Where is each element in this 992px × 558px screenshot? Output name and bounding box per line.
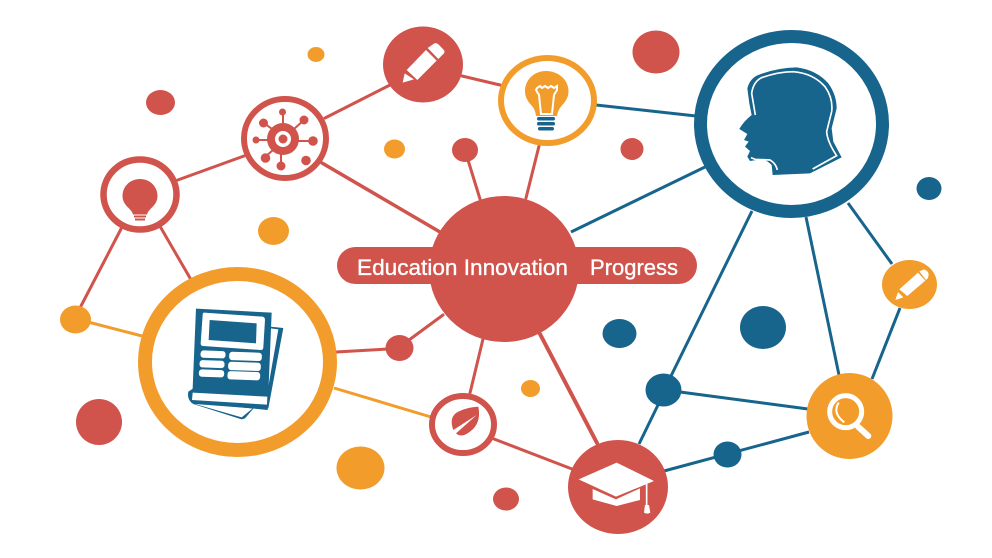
central hub with title pill	[337, 196, 697, 342]
node: document, orange ring	[145, 274, 330, 450]
connector lines: red	[81, 76, 597, 469]
title text: Education Innovation	[357, 255, 568, 280]
connector lines: blue	[571, 105, 900, 471]
node: magnifying glass	[806, 373, 892, 459]
node: pencil on orange	[882, 260, 937, 309]
node: head profile	[700, 36, 882, 212]
node: network gear	[244, 99, 326, 178]
title text: Progress	[590, 255, 678, 280]
node: light bulb, orange ring	[501, 58, 594, 143]
node: leaf	[432, 396, 494, 453]
decorative dots	[60, 30, 942, 510]
connector lines: orange	[88, 322, 431, 417]
node: light bulb outline, red	[104, 160, 176, 230]
node: pencil on red	[383, 26, 463, 102]
node: graduation cap	[568, 440, 668, 534]
